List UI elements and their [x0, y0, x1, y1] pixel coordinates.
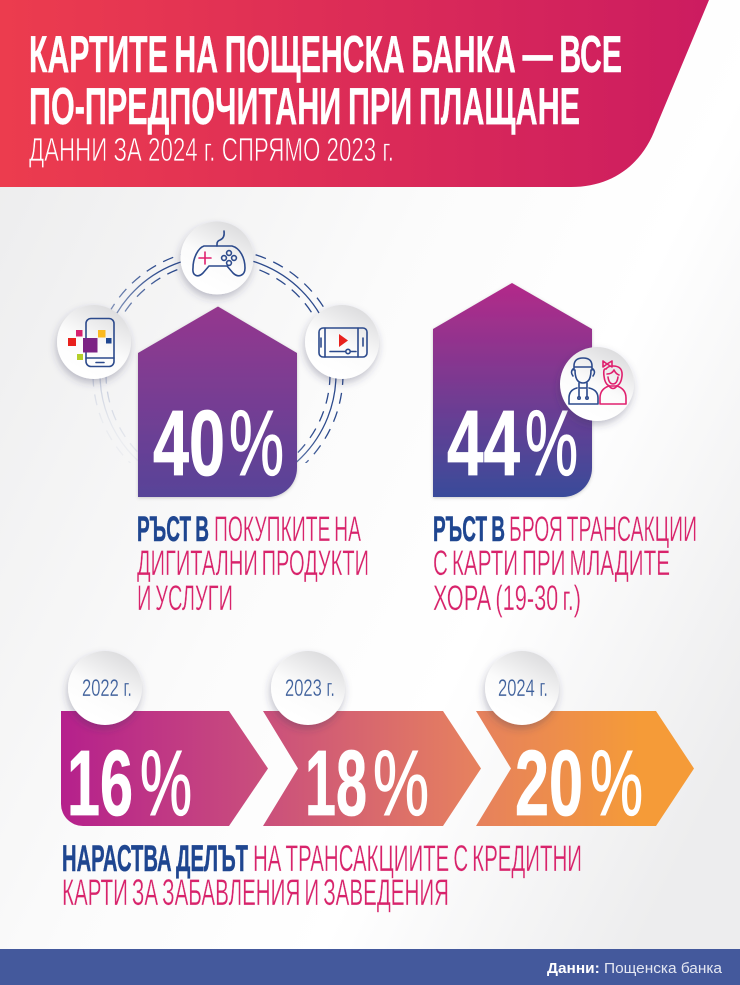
caption: 44%: ХОРА (19-30 г.)	[433, 579, 581, 618]
icon: phone with app squares	[57, 305, 131, 379]
year badge 2022: 2022 г.	[82, 675, 132, 702]
year badge 2024: 2024 г.	[498, 675, 548, 702]
panel: 40% digital purchases	[138, 306, 297, 497]
house shape 40%	[138, 306, 297, 497]
caption: 40%: РЪСТ В	[137, 510, 209, 549]
arrow: 2022	[61, 651, 268, 835]
year badge 2024	[485, 651, 559, 725]
header banner	[0, 0, 709, 187]
caption: credit card share: НАРАСТВА ДЕЛЪТ	[62, 838, 248, 879]
caption: credit card share: КАРТИ ЗА ЗАБАВЛЕНИЯ И ЗАВЕДЕНИЯ	[62, 872, 449, 913]
dashed ring around left panel	[92, 254, 344, 463]
house shape 44%	[433, 283, 592, 497]
caption: 40%	[137, 510, 369, 618]
title	[29, 26, 622, 136]
caption: 40%: ДИГИТАЛНИ ПРОДУКТИ	[137, 544, 369, 583]
year badge 2023	[271, 651, 345, 725]
value 18%: 18	[305, 731, 367, 835]
caption: 40%: ПОКУПКИТЕ НА	[214, 510, 361, 549]
caption: 44%: РЪСТ В	[433, 510, 505, 549]
value 44%: %	[525, 391, 578, 495]
value 40%: %	[229, 391, 284, 495]
footer bar	[0, 949, 740, 985]
subtitle: ДАННИ ЗА 2024 г. СПРЯМО 2023 г.	[29, 131, 394, 168]
panel: 44% young people	[433, 283, 592, 497]
year badge 2023: 2023 г.	[285, 675, 335, 702]
icon: video player	[305, 305, 379, 379]
arrow: 2024	[476, 651, 694, 835]
year badge 2022	[68, 651, 142, 725]
source note: Данни: Пощенска банка	[547, 960, 723, 977]
caption: 44%	[433, 510, 697, 618]
value 16%: 16	[67, 731, 133, 835]
arrow: 2023	[263, 651, 481, 835]
value 18%: %	[373, 731, 429, 835]
value 16%: %	[140, 731, 192, 835]
value 20%: %	[590, 731, 643, 835]
icon: game controller	[180, 222, 254, 294]
caption: credit card share	[62, 838, 582, 913]
caption: 40%: И УСЛУГИ	[137, 579, 233, 618]
icon: young people	[560, 347, 634, 421]
value 44%: 44	[447, 391, 520, 495]
value 20%: 20	[515, 731, 583, 835]
value 40%: 40	[153, 391, 225, 495]
